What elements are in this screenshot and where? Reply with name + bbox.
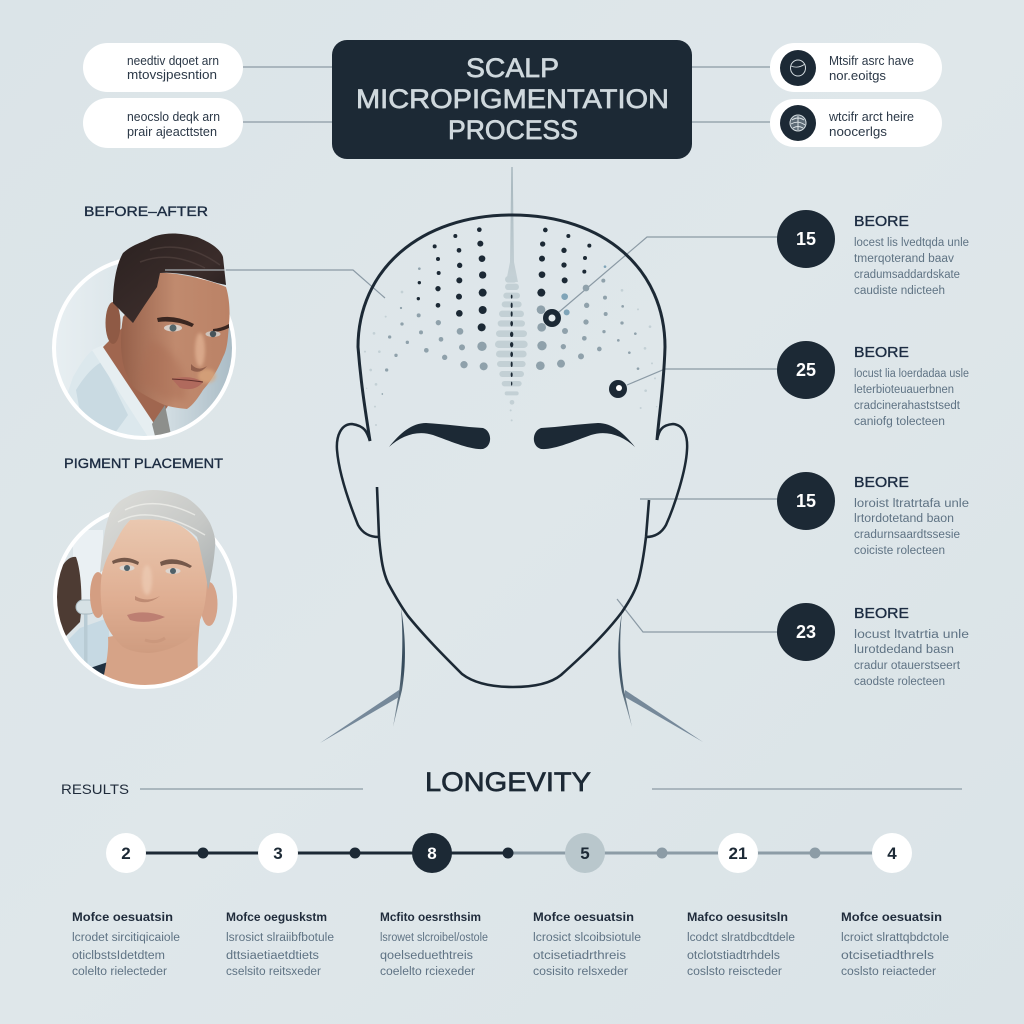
step 3: cradurnsaardtssesie (854, 529, 960, 541)
column 5: coslsto reiscteder (687, 966, 782, 978)
column 4: cosisito relsxeder (533, 966, 628, 978)
column 2: dttsiaetiaetdtiets (226, 950, 319, 962)
timeline (106, 833, 912, 873)
column 1: Mofce oesuatsin (72, 910, 173, 924)
pigment dots (364, 227, 657, 426)
eyebrows (389, 423, 490, 449)
step 3: 15 (796, 491, 816, 511)
top-right pill 2 (770, 99, 942, 147)
head outline (358, 215, 665, 441)
step 3: BEORE (854, 474, 909, 491)
top-left pill 2: neocslo deqk arn (127, 110, 220, 124)
column 1: lcrodet sircitiqicaiole (72, 932, 180, 944)
timeline node 2: 2 (121, 844, 131, 863)
column 6: coslsto reiacteder (841, 966, 936, 978)
column 4: otcisetiadrthreis (533, 950, 626, 962)
marker: target dot 1 (543, 309, 561, 327)
timeline node 21: 21 (729, 844, 747, 863)
column 6: lcroict slrattqbdctole (841, 932, 949, 944)
column 6: Mofce oesuatsin (841, 910, 942, 924)
title (356, 53, 669, 145)
needle (506, 167, 518, 282)
top-right pill 2: noocerlgs (829, 125, 887, 139)
title: PROCESS (448, 115, 578, 145)
column 4: lcrosict slcoibsiotule (533, 932, 641, 944)
step 1: locest lis lvedtqda unle (854, 237, 969, 249)
column 3 (380, 910, 488, 978)
column 3: coelelto rciexeder (380, 966, 475, 978)
top-right pill 1 (770, 43, 942, 92)
heading: pigment placement: PIGMENT PLACEMENT (64, 455, 223, 471)
connector lines (226, 67, 778, 632)
step 3 (777, 472, 969, 557)
timeline node 4: 4 (887, 844, 897, 863)
step 4: locust ltvatrtia unle (854, 629, 969, 641)
step 2: cradcinerahaststsedt (854, 400, 961, 412)
column 2: Mofce oeguskstm (226, 910, 327, 924)
head diagram (320, 167, 703, 743)
results label: RESULTS (61, 781, 129, 797)
step 4: cradur otauerstseert (854, 660, 961, 672)
top-left pill 2: prair ajeacttsten (127, 125, 217, 139)
step 1: cradumsaddardskate (854, 269, 960, 281)
step 2: caniofg tolecteen (854, 416, 945, 428)
top-left pill 2 (83, 98, 243, 148)
column 2: cselsito reitsxeder (226, 966, 321, 978)
step 2: leterbioteuauerbnen (854, 384, 954, 396)
title: MICROPIGMENTATION (356, 84, 669, 114)
column 2 (226, 910, 334, 978)
heading: before-after: BEFORE–AFTER (84, 203, 208, 219)
step 1 (777, 210, 969, 297)
left ear (337, 424, 379, 537)
column 3: lsrowet slcroibel/ostole (380, 932, 488, 944)
neck lines (393, 608, 405, 727)
column 5: otclotstiadtrhdels (687, 950, 780, 962)
top-left pill 1: needtiv dqoet arn (127, 54, 219, 68)
timeline node 8 (412, 833, 452, 873)
facial features (112, 558, 192, 642)
column 6: otcisetiadthrels (841, 950, 934, 962)
step 1: 15 (796, 229, 816, 249)
column 1: oticlbstsIdetdtem (72, 950, 165, 962)
step 3: coiciste rolecteen (854, 545, 945, 557)
icon: head outline (780, 50, 816, 86)
connector over hair (165, 269, 226, 271)
top-left pill 1: mtovsjpesntion (127, 68, 217, 82)
column 1: colelto rielecteder (72, 966, 167, 978)
step 4: caodste rolecteen (854, 676, 945, 688)
column 5 (687, 910, 795, 978)
icon: textured scalp (780, 105, 816, 141)
timeline node 2 (106, 833, 146, 873)
right ear (646, 424, 687, 537)
top-left pill 1 (83, 43, 243, 92)
marker: target dot 2 (609, 380, 627, 398)
photo: after portrait (50, 490, 235, 692)
step 4: BEORE (854, 605, 909, 622)
timeline node 5: 5 (580, 844, 590, 863)
timeline node 21 (718, 833, 758, 873)
column 2: lsrosict slraiibfbotule (226, 932, 334, 944)
timeline node 3: 3 (273, 844, 283, 863)
column 4: Mofce oesuatsin (533, 910, 634, 924)
timeline node 3 (258, 833, 298, 873)
timeline node 4 (872, 833, 912, 873)
column 5: Mafco oesusitsln (687, 910, 788, 924)
photo: before portrait (52, 233, 234, 440)
step 4 (777, 603, 969, 688)
step 2: locust lia loerdadaa usle (854, 368, 969, 380)
column 4 (533, 910, 641, 978)
shoulders (320, 690, 399, 743)
column 1 (72, 910, 180, 978)
facial features (157, 317, 229, 389)
timeline node 8: 8 (427, 844, 437, 863)
title box (332, 40, 692, 159)
timeline node 5 (565, 833, 605, 873)
step 1: BEORE (854, 213, 909, 230)
step 1: caudiste ndicteeh (854, 285, 945, 297)
column 3: Mcfito oesrsthsim (380, 910, 481, 924)
face outline (377, 487, 649, 687)
step 4: lurotdedand basn (854, 644, 954, 656)
top-right pill 1: nor.eoitgs (829, 69, 886, 83)
top-right pill 1: Mtsifr asrc have (829, 54, 914, 68)
column 3: qoelseduethtreis (380, 950, 473, 962)
title: SCALP (466, 53, 559, 83)
step 2: 25 (796, 360, 816, 380)
step 3: lrtordotetand baon (854, 513, 954, 525)
step 4: 23 (796, 622, 816, 642)
step 3: loroist ltratrtafa unle (854, 498, 969, 510)
column 5: lcodct slratdbcdtdele (687, 932, 795, 944)
step 2 (777, 341, 969, 428)
step 1: tmerqoterand baav (854, 253, 954, 265)
longevity heading: LONGEVITY (425, 767, 591, 797)
step 2: BEORE (854, 344, 909, 361)
top-right pill 2: wtcifr arct heire (828, 110, 914, 124)
column 6 (841, 910, 949, 978)
